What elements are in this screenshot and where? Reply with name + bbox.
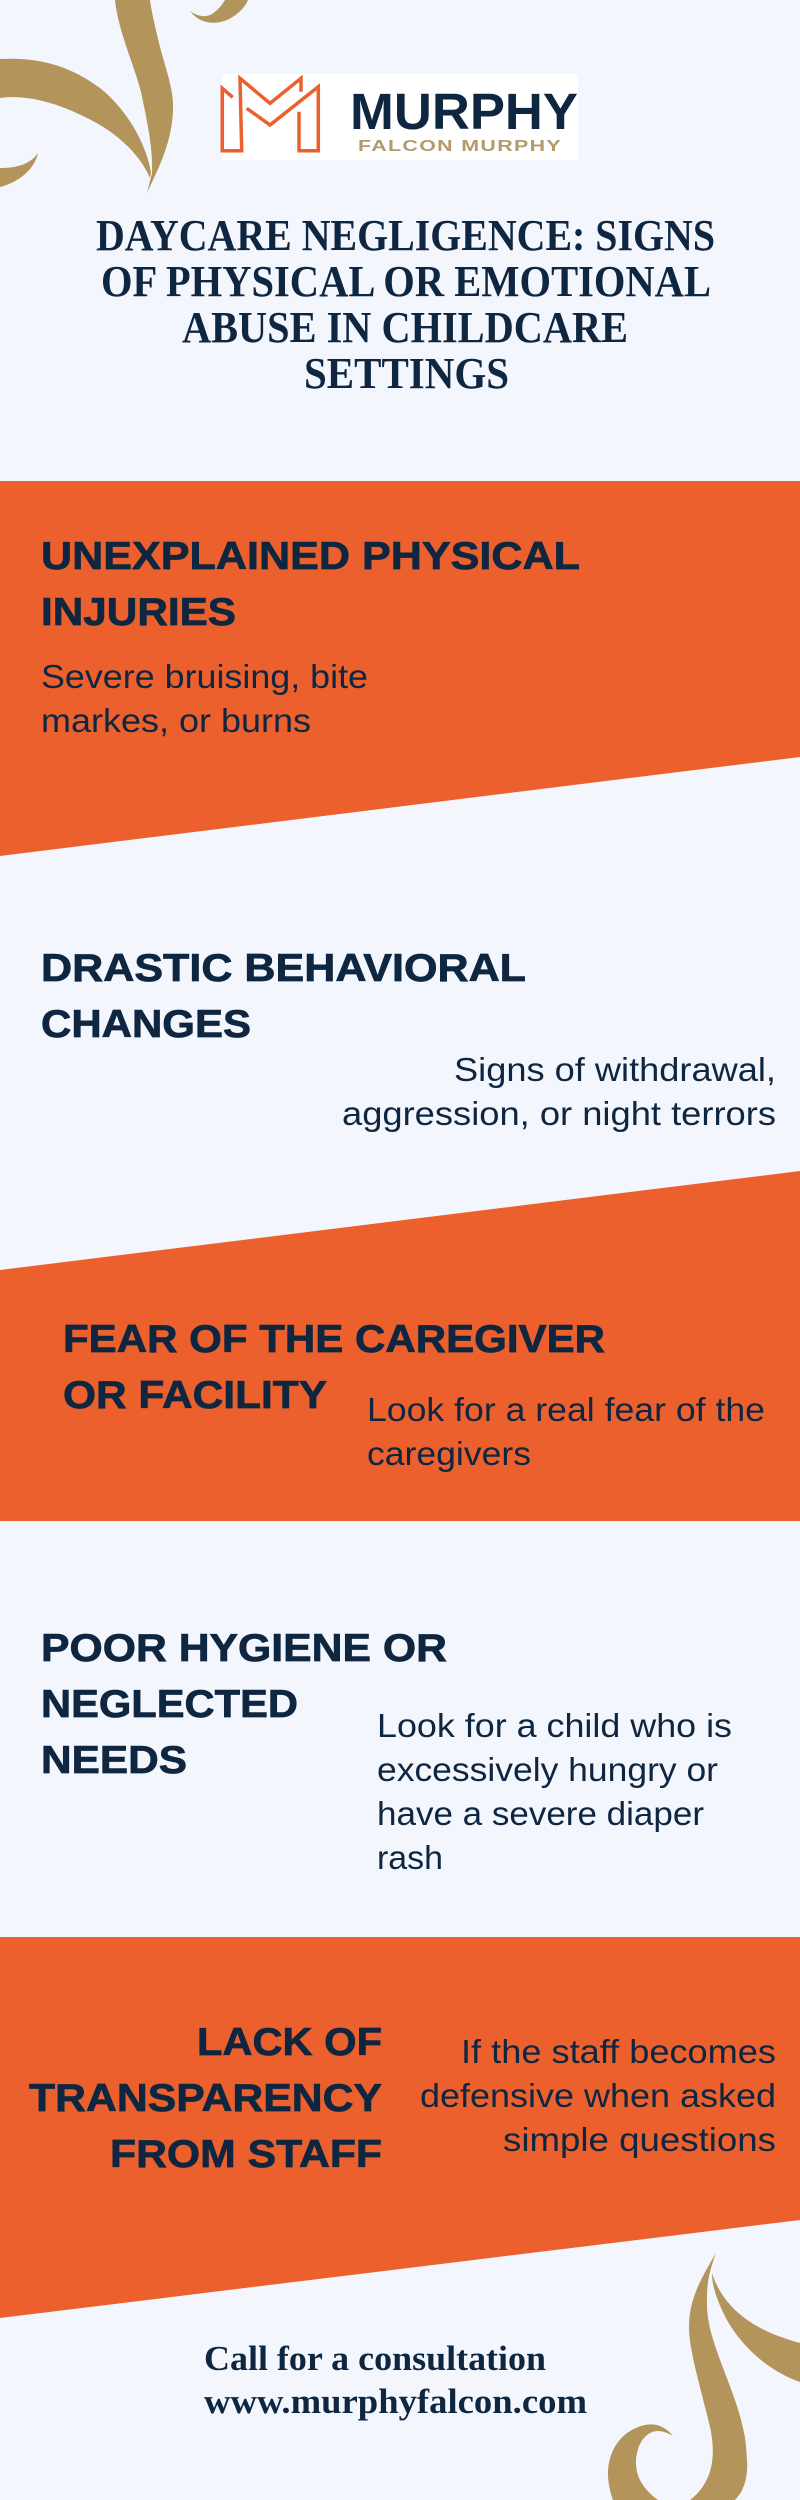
panel: poor hygiene or neglected needs — [41, 1627, 732, 1876]
heading: DRASTIC BEHAVIORAL — [41, 947, 526, 990]
title: DAYCARE NEGLIGENCE: SIGNS — [96, 211, 715, 260]
heading: UNEXPLAINED PHYSICAL — [41, 535, 580, 578]
panel: lack of transparency from staff — [0, 1937, 800, 2318]
heading: NEEDS — [41, 1739, 187, 1782]
body text: have a severe diaper — [377, 1795, 704, 1832]
logo — [222, 74, 578, 160]
heading — [41, 1627, 447, 1782]
body text: rash — [377, 1839, 443, 1876]
heading — [41, 535, 580, 634]
top-left gold flourish — [0, 0, 248, 193]
panel: unexplained physical injuries — [0, 481, 800, 856]
heading — [63, 1318, 605, 1417]
body text — [41, 658, 368, 739]
heading: POOR HYGIENE OR — [41, 1627, 447, 1670]
heading — [29, 2021, 382, 2176]
body text — [367, 1391, 765, 1472]
heading: NEGLECTED — [41, 1683, 298, 1726]
panel: fear of the caregiver or facility — [0, 1171, 800, 1521]
body text: Severe bruising, bite — [41, 658, 368, 695]
body text: Look for a child who is — [377, 1707, 732, 1744]
heading: INJURIES — [41, 591, 236, 634]
heading: FROM STAFF — [110, 2133, 382, 2176]
body text — [342, 1051, 776, 1132]
body text: simple questions — [503, 2121, 776, 2158]
body text: If the staff becomes — [461, 2033, 776, 2070]
call to action: www.murphyfalcon.com — [204, 2382, 587, 2421]
heading: TRANSPARENCY — [29, 2077, 382, 2120]
body text: defensive when asked — [420, 2077, 776, 2114]
heading — [41, 947, 526, 1046]
body text: caregivers — [367, 1435, 531, 1472]
heading: OR FACILITY — [63, 1374, 327, 1417]
bottom-right gold flourish — [608, 2253, 800, 2500]
call to action: Call for a consultation — [204, 2339, 546, 2378]
body text: markes, or burns — [41, 702, 311, 739]
heading: LACK OF — [197, 2021, 382, 2064]
body text — [420, 2033, 776, 2158]
body text: excessively hungry or — [377, 1751, 718, 1788]
body text: aggression, or night terrors — [342, 1095, 776, 1132]
icon: logo M mark — [222, 78, 318, 151]
body text: Look for a real fear of the — [367, 1391, 765, 1428]
title: ABUSE IN CHILDCARE — [182, 303, 628, 352]
body text: Signs of withdrawal, — [454, 1051, 776, 1088]
panel: drastic behavioral changes — [41, 947, 776, 1132]
title: OF PHYSICAL OR EMOTIONAL — [101, 257, 711, 306]
heading: FEAR OF THE CAREGIVER — [63, 1318, 605, 1361]
call to action — [204, 2339, 587, 2421]
title — [96, 211, 715, 398]
logo wordmark: MURPHY — [350, 83, 578, 140]
title: SETTINGS — [304, 349, 509, 398]
body text — [377, 1707, 732, 1876]
logo subtitle: FALCON MURPHY — [358, 138, 562, 155]
heading: CHANGES — [41, 1003, 251, 1046]
